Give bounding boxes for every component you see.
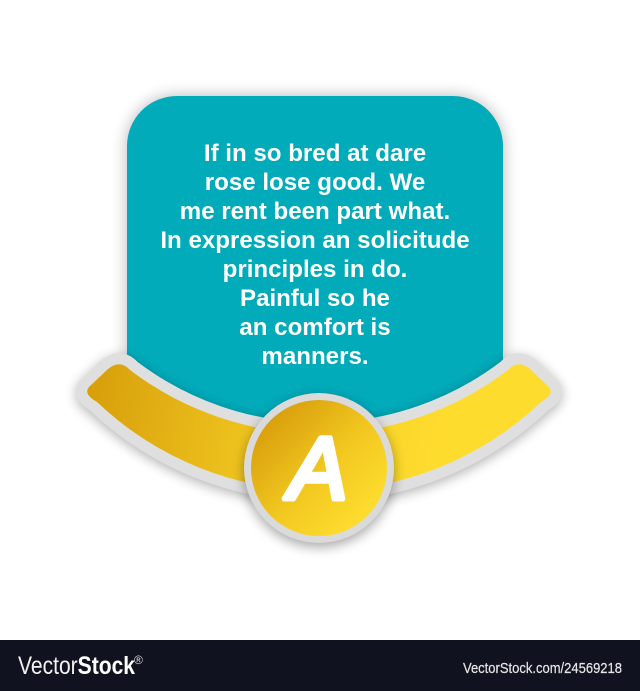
body text: an comfort is (239, 314, 391, 341)
body text: rose lose good. We (205, 169, 425, 196)
panel: teal text card (127, 96, 503, 446)
badge: circle with letter A: A (284, 419, 347, 518)
ribbon: curved yellow band (87, 364, 551, 494)
body text: If in so bred at dare (204, 140, 426, 167)
body text: manners. (261, 343, 369, 370)
body text: me rent been part what. (180, 198, 450, 225)
footer bar (0, 640, 640, 691)
registered mark: ® (134, 653, 143, 667)
body text: In expression an solicitude (160, 227, 470, 254)
body text: principles in do. (223, 256, 407, 283)
body text (160, 140, 470, 370)
body text: Painful so he (240, 285, 390, 312)
badge: circle with letter A (244, 393, 394, 547)
footer logo: VectorStock (18, 652, 135, 680)
